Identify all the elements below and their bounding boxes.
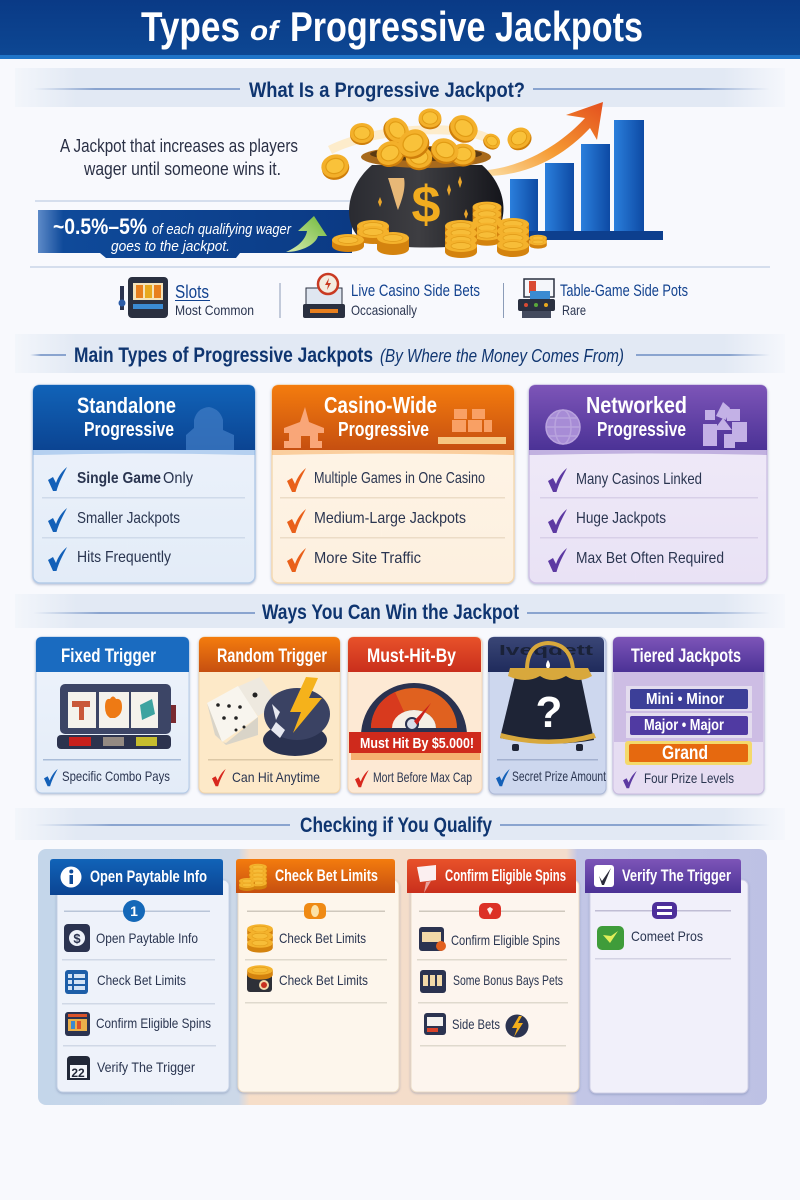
- panel: random trigger: Random Trigger: [217, 646, 327, 667]
- column: verify the trigger: Comeet Pros: [631, 928, 703, 944]
- panel: tiered jackpots: [613, 637, 764, 794]
- game type: table-game side pots: [518, 279, 688, 318]
- game type: slots: Slots: [175, 282, 209, 302]
- tier: major major: Major • Major: [644, 717, 724, 734]
- icon: globe: [546, 410, 580, 444]
- panel: mystery prize: Iveqdett: [499, 642, 593, 659]
- icon: network nodes: [703, 402, 747, 448]
- definition text: [60, 136, 298, 179]
- callout: must hit by amount: [349, 732, 481, 760]
- panel: qualification background: [38, 849, 767, 1105]
- panel: casino-wide progressive: [272, 385, 514, 583]
- icon: dollar: $: [73, 931, 81, 946]
- step badge 1: 1: [130, 903, 138, 919]
- game type: slots: [118, 277, 254, 318]
- column: confirm eligible spins: [407, 859, 579, 1092]
- panel: must-hit-by: [348, 637, 482, 793]
- panel: standalone progressive: Progressive: [84, 419, 174, 441]
- panel: casino-wide progressive: Casino-Wide: [324, 392, 437, 418]
- wager share banner: [35, 200, 355, 258]
- icon: chip stack: [247, 965, 273, 992]
- section heading: checking: [15, 808, 785, 840]
- wager share banner: of each qualifying wager: [152, 221, 292, 238]
- game type: table-game side pots: Table-Game Side Pots: [560, 281, 688, 300]
- section heading: ways to win: Ways You Can Win the Jackpot: [262, 601, 519, 624]
- icon: checkbox: [594, 865, 614, 887]
- panel: networked progressive: Many Casinos Linked: [576, 471, 702, 488]
- column: verify the trigger: [585, 859, 748, 1093]
- icon: table game: [518, 279, 555, 318]
- section heading: main types: Main Types of Progressive Jackpots: [74, 344, 373, 367]
- arrow: growth: [488, 102, 603, 176]
- icon: slot small: [419, 927, 446, 951]
- wager share banner: goes to the jackpot.: [111, 238, 230, 255]
- column: check bet limits: Check Bet Limits: [279, 930, 366, 946]
- panel: fixed trigger: Specific Combo Pays: [62, 768, 170, 784]
- panel: standalone progressive: Hits Frequently: [77, 549, 171, 566]
- tier: mini minor: Mini • Minor: [646, 691, 724, 708]
- column: confirm eligible spins: Confirm Eligible Spins: [445, 867, 566, 885]
- icon: coin stacks: [239, 864, 267, 891]
- section heading: main types: [15, 334, 785, 373]
- panel: fixed trigger: [36, 637, 189, 793]
- icon: casino building: [284, 407, 324, 448]
- column: verify the trigger: Verify The Trigger: [622, 866, 731, 885]
- panel: random trigger: [199, 637, 340, 793]
- panel: casino-wide progressive: Multiple Games in One Casino: [314, 470, 485, 487]
- section heading: ways to win: [15, 594, 785, 628]
- game type: live casino side bets: Occasionally: [351, 302, 417, 318]
- panel: networked progressive: [529, 385, 767, 583]
- section heading: checking: Checking if You Qualify: [300, 814, 492, 837]
- icon: dice and lightning: [207, 677, 330, 756]
- panel: fixed trigger: Fixed Trigger: [61, 646, 156, 667]
- icon: spins: [65, 1012, 90, 1036]
- icon: info circle: [60, 866, 82, 888]
- panel: casino-wide progressive: More Site Traffic: [314, 550, 421, 567]
- icon: calendar: 22: [71, 1066, 85, 1080]
- step badge 2: [304, 903, 326, 919]
- column: check bet limits: Check Bet Limits: [275, 866, 378, 885]
- icon: slot reels: [57, 684, 176, 749]
- panel: standalone progressive: Only: [163, 470, 193, 487]
- column: confirm eligible spins: Confirm Eligible Spins: [451, 932, 560, 948]
- game type: slots: Most Common: [175, 302, 254, 318]
- panel: casino-wide progressive: Medium-Large Jackpots: [314, 510, 466, 527]
- icon: stacked tower: [186, 407, 234, 450]
- title banner: Progressive Jackpots: [290, 3, 643, 50]
- column: confirm eligible spins: Some Bonus Bays Pets: [453, 972, 563, 988]
- icon: reels: [420, 970, 446, 993]
- icon: chips row: [452, 409, 492, 432]
- column: open paytable info: Open Paytable Info: [96, 930, 198, 946]
- icon: screen flag: [417, 865, 436, 893]
- icon: side bet machine: [424, 1013, 446, 1035]
- icon: gauge: [361, 683, 467, 736]
- title banner: of: [250, 15, 281, 46]
- panel: random trigger: Can Hit Anytime: [232, 769, 320, 785]
- column: open paytable info: [50, 859, 229, 1092]
- icon: pot of gold: $: [412, 176, 441, 234]
- icon: list: [65, 970, 88, 994]
- panel: standalone progressive: Standalone: [77, 393, 176, 418]
- title banner: [0, 0, 800, 59]
- step badge 4: [652, 902, 677, 919]
- panel: networked progressive: Networked: [586, 392, 687, 418]
- column: check bet limits: [236, 859, 399, 1092]
- bar chart: rising jackpot: [505, 120, 663, 240]
- definition text: wager until someone wins it.: [83, 159, 281, 179]
- icon: pot of gold: [319, 108, 547, 258]
- panel: standalone progressive: [33, 385, 255, 583]
- panel: mystery prize: [488, 637, 606, 794]
- icon: live casino table: [303, 274, 345, 318]
- icon: slot machine: [118, 277, 168, 318]
- column: open paytable info: Confirm Eligible Spins: [96, 1015, 211, 1031]
- tier: mini minor: [626, 686, 752, 711]
- game type: live casino side bets: Live Casino Side Bets: [351, 281, 480, 300]
- panel: standalone progressive: Single Game: [77, 470, 161, 487]
- column: open paytable info: Check Bet Limits: [97, 972, 186, 988]
- title banner: Types: [141, 3, 240, 50]
- panel: tiered jackpots: Tiered Jackpots: [631, 646, 741, 667]
- column: check bet limits: Check Bet Limits: [279, 972, 368, 988]
- icon: coin stack: [247, 924, 273, 953]
- tier: grand: [625, 741, 752, 765]
- column: open paytable info: Open Paytable Info: [90, 867, 207, 886]
- panel: networked progressive: Progressive: [597, 419, 686, 441]
- icon: calendar: [67, 1056, 90, 1080]
- panel: casino-wide progressive: Progressive: [338, 419, 429, 441]
- section heading: main types: (By Where the Money Comes From): [380, 346, 624, 366]
- tier: grand: Grand: [662, 743, 708, 764]
- wager share banner: ~0.5%–5%: [53, 214, 147, 239]
- panel: tiered jackpots: Four Prize Levels: [644, 770, 734, 786]
- column: confirm eligible spins: Side Bets: [452, 1016, 500, 1032]
- column: open paytable info: Verify The Trigger: [97, 1059, 195, 1075]
- step badge 1: [123, 900, 145, 922]
- game type: table-game side pots: Rare: [562, 302, 586, 318]
- definition text: A Jackpot that increases as players: [60, 136, 298, 156]
- panel: networked progressive: Huge Jackpots: [576, 510, 666, 527]
- panel: networked progressive: Max Bet Often Required: [576, 550, 724, 567]
- tier: major major: [626, 713, 752, 738]
- step badge 3: [479, 903, 501, 919]
- icon: mystery bag: [500, 643, 596, 751]
- icon: green check: [597, 926, 624, 950]
- game type: live casino side bets: [303, 274, 480, 318]
- section heading: what is: [15, 68, 785, 107]
- callout: must hit by amount: Must Hit By $5.000!: [360, 735, 474, 752]
- section heading: what is: What Is a Progressive Jackpot?: [249, 79, 525, 102]
- icon: lightning badge: [506, 1014, 528, 1038]
- icon: mystery bag: ?: [536, 688, 562, 737]
- panel: must-hit-by: Mort Before Max Cap: [373, 769, 472, 785]
- icon: dollar: [64, 924, 90, 952]
- panel: mystery prize: Secret Prize Amount: [512, 768, 606, 784]
- panel: must-hit-by: Must-Hit-By: [367, 646, 456, 667]
- panel: standalone progressive: Smaller Jackpots: [77, 510, 180, 527]
- icon: green up arrow: [286, 216, 327, 252]
